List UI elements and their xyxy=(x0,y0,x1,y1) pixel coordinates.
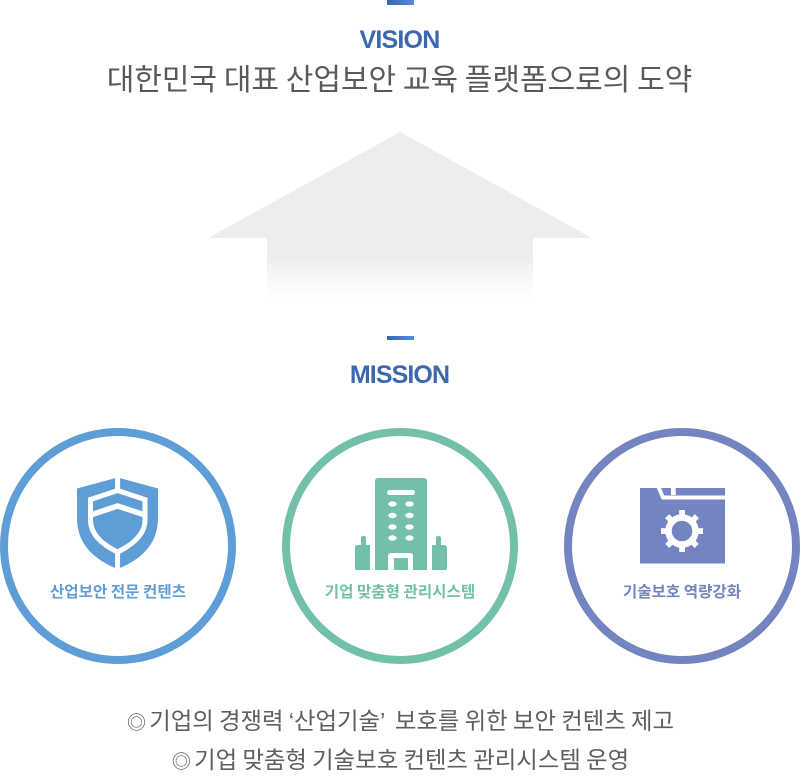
label: technology protection: 기술보호 역량강화 xyxy=(623,583,741,601)
label: tailored management: 기업 맞춤형 관리시스템 xyxy=(325,583,475,601)
icon: shield xyxy=(77,477,158,570)
icon: buildings xyxy=(355,478,447,570)
circle: tailored management xyxy=(286,432,514,660)
icon: folder with gear xyxy=(640,487,726,564)
vision statement: 대한민국 대표 산업보안 교육 플랫폼으로의 도약 xyxy=(107,64,692,97)
bullet line 1: ◎ 기업의 경쟁력 ‘산업기술’ 보호를 위한 보안 컨텐츠 제고 xyxy=(127,708,674,734)
circle: industrial security content xyxy=(4,432,232,660)
mission heading: MISSION xyxy=(350,361,449,389)
vision heading: VISION xyxy=(360,26,439,54)
vision accent bar xyxy=(387,0,414,5)
circle: technology protection xyxy=(568,432,796,660)
bullet line 2: ◎ 기업 맞춤형 기술보호 컨텐츠 관리시스템 운영 xyxy=(172,747,629,773)
label: industrial security content: 산업보안 전문 컨텐츠 xyxy=(50,583,186,601)
mission accent bar xyxy=(387,336,414,340)
